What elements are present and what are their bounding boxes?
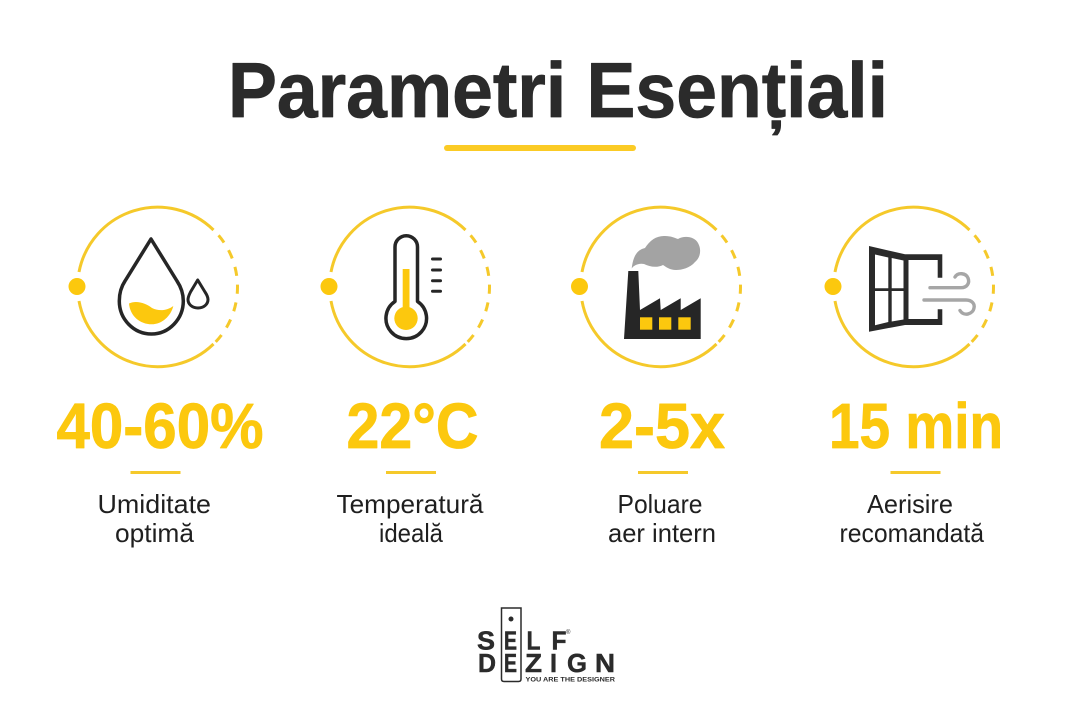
logo wordmark: S: [477, 626, 495, 656]
logo wordmark: D: [478, 648, 496, 678]
logo wordmark: E: [504, 648, 517, 678]
label: humidity: Umiditate: [98, 489, 211, 519]
circle ring: ventilation: [824, 207, 993, 367]
label: humidity: optimă: [115, 518, 195, 548]
label: pollution: aer intern: [608, 518, 716, 548]
logo ruler: [502, 608, 521, 682]
icon: thermometer: [386, 236, 440, 339]
title: Parametri Esențiali: [228, 46, 888, 136]
separator: [890, 471, 940, 474]
icon: open window with wind: [869, 246, 974, 332]
label: ventilation: [840, 489, 985, 548]
logo wordmark: Z: [525, 648, 542, 678]
label: pollution: [608, 489, 716, 548]
value: ventilation: 15 min: [829, 390, 1003, 462]
logo tagline: YOU ARE THE DESIGNER: [526, 678, 616, 684]
title underline: [444, 145, 636, 151]
panel: ventilation: [824, 207, 1003, 548]
logo wordmark: E: [504, 626, 517, 656]
circle ring: temperature: [320, 207, 489, 367]
panel: pollution: [571, 207, 740, 548]
value: pollution: 2-5x: [599, 390, 725, 462]
icon: water drops: [119, 239, 208, 334]
logo wordmark: [477, 626, 615, 678]
circle ring: pollution: [571, 207, 740, 367]
logo: Self Dezign: [477, 608, 616, 684]
label: pollution: Poluare: [618, 489, 702, 519]
icon: factory with smoke: [624, 236, 701, 339]
value: humidity: 40-60%: [56, 390, 264, 462]
logo wordmark: N: [595, 648, 615, 678]
label: temperature: Temperatură: [336, 489, 484, 519]
value: temperature: 22°C: [346, 390, 478, 462]
label: temperature: [336, 489, 484, 548]
label: ventilation: recomandată: [840, 518, 985, 548]
logo wordmark: F: [552, 626, 566, 656]
panel: humidity: [56, 207, 264, 548]
separator: [386, 471, 436, 474]
label: humidity: [98, 489, 211, 548]
label: ventilation: Aerisire: [867, 489, 953, 519]
separator: [638, 471, 688, 474]
logo registered mark: ®: [566, 629, 571, 636]
logo wordmark: I: [550, 648, 557, 678]
panel: temperature: [320, 207, 489, 548]
logo wordmark: G: [567, 648, 587, 678]
separator: [130, 471, 180, 474]
logo wordmark: L: [526, 626, 541, 656]
label: temperature: ideală: [379, 518, 443, 548]
circle ring: humidity: [68, 207, 237, 367]
